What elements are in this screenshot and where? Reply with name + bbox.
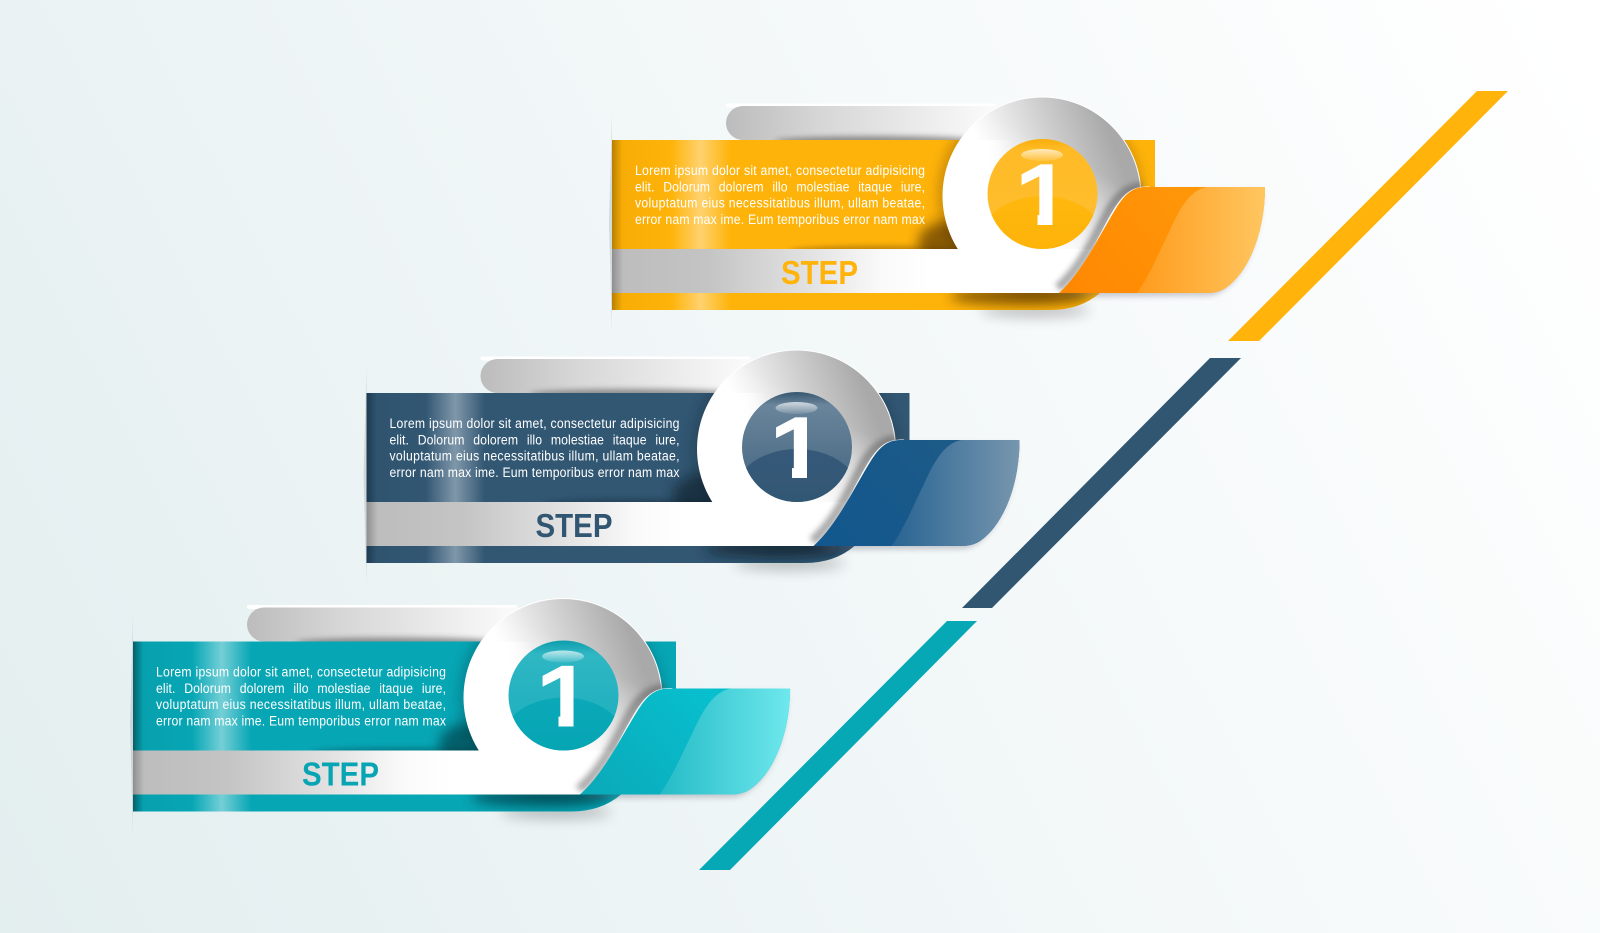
text block: voluptatum eius necessitatibus illum, ullam beatae, (156, 696, 446, 712)
grey pill (480, 356, 752, 393)
number badge (988, 139, 1098, 249)
text block: Lorem ipsum dolor sit amet, consectetur adipisicing (156, 664, 446, 680)
text block: error nam max ime. Eum temporibus error nam max (635, 211, 925, 227)
label band (133, 750, 566, 794)
diagonal stripe: orange (1228, 91, 1508, 341)
text block: error nam max ime. Eum temporibus error nam max (390, 464, 680, 480)
ring (697, 350, 896, 504)
number badge (742, 392, 852, 502)
number badge: 1 (536, 648, 596, 745)
label band (612, 249, 1045, 293)
label band (366, 502, 800, 546)
ring (942, 98, 1142, 251)
panel: orange step (609, 94, 1265, 332)
text block: Lorem ipsum dolor sit amet, consectetur adipisicing (390, 415, 679, 431)
text block: voluptatum eius necessitatibus illum, ullam beatae, (390, 448, 679, 464)
text block (156, 664, 446, 729)
text block: error nam max ime. Eum temporibus error nam max (156, 713, 446, 729)
step label: STEP (781, 254, 858, 291)
ribbon leaf (806, 439, 1020, 550)
step label: STEP (536, 507, 612, 544)
step label: STEP (302, 756, 379, 792)
ribbon leaf (573, 688, 790, 798)
ribbon leaf (1052, 186, 1265, 297)
text block: elit. Dolorum dolorem illo molestiae itaque iure, (390, 432, 679, 447)
text block (390, 415, 680, 480)
ring (464, 598, 662, 752)
grey pill (726, 104, 996, 140)
text block: Lorem ipsum dolor sit amet, consectetur adipisicing (635, 162, 925, 178)
number badge: 1 (1015, 147, 1075, 243)
text block: elit. Dolorum dolorem illo molestiae itaque iure, (156, 680, 446, 696)
diagonal stripe: navy (962, 358, 1241, 608)
text block: voluptatum eius necessitatibus illum, ullam beatae, (635, 195, 925, 211)
number badge: 1 (770, 400, 829, 496)
panel: navy step (364, 347, 1020, 585)
panel: teal step (130, 596, 790, 834)
text block (635, 162, 925, 227)
grey pill (247, 605, 520, 642)
number badge (508, 640, 618, 750)
diagonal stripe: teal (699, 621, 977, 870)
text block: elit. Dolorum dolorem illo molestiae itaque iure, (635, 179, 925, 194)
